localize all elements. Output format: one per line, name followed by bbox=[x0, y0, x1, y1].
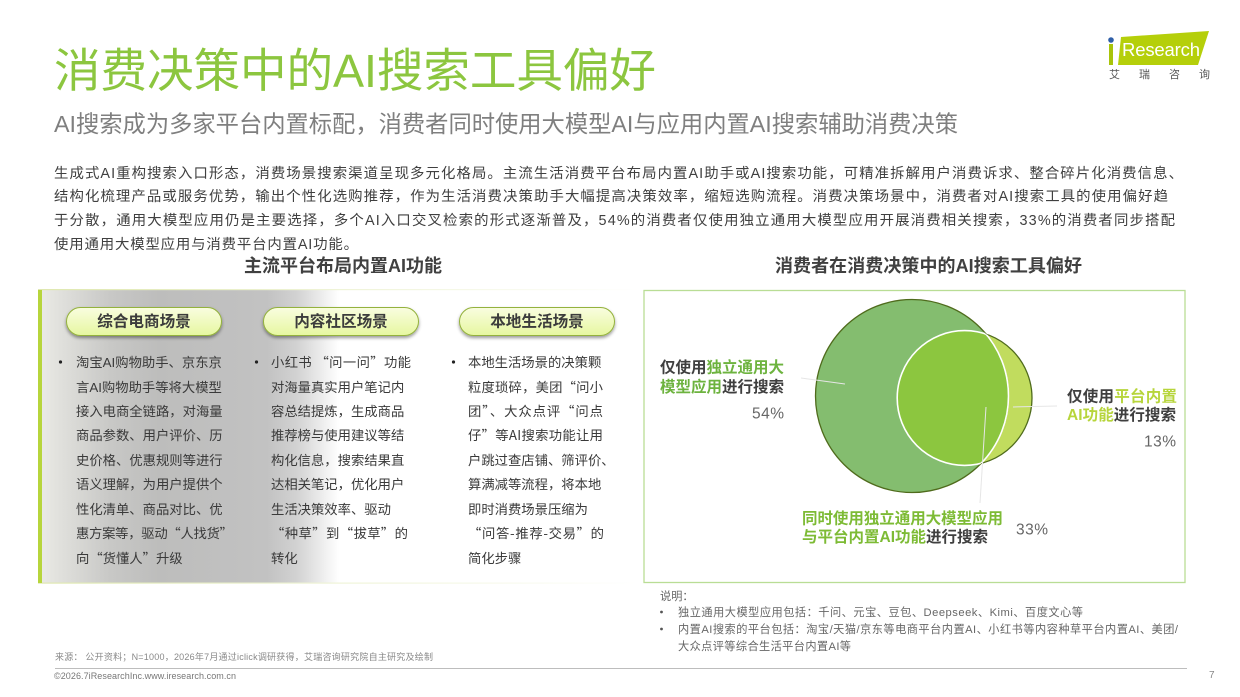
column: local life: 简化步骤 bbox=[468, 550, 521, 566]
column: local life: 算满减等流程，将本地 bbox=[468, 476, 601, 492]
label: both: 与平台内置AI功能进行搜索 bbox=[802, 527, 988, 546]
column: content community: “种草”到“拔草”的 bbox=[271, 523, 408, 542]
notes: 说明： bbox=[660, 589, 694, 603]
panel: platform scenarios bbox=[38, 289, 640, 584]
label: platform only bbox=[1067, 386, 1177, 450]
column: local life: 即时消费场景压缩为 bbox=[468, 502, 588, 517]
column: local life: 团”、大众点评“问点 bbox=[468, 401, 603, 420]
label: general models only: 仅使用独立通用大 bbox=[660, 358, 784, 376]
label: both: 33% bbox=[1016, 522, 1048, 538]
title: 消费决策中的AI搜索工具偏好 bbox=[54, 45, 656, 97]
column: e-commerce: 史价格、优惠规则等进行 bbox=[76, 452, 223, 468]
label: platform only: 13% bbox=[1144, 434, 1176, 450]
column: e-commerce: 商品参数、用户评价、历 bbox=[76, 427, 223, 443]
leader line: both bbox=[980, 407, 986, 503]
venn diagram bbox=[816, 300, 1032, 492]
column: local life: 粒度琐碎，美团“问小 bbox=[468, 377, 603, 396]
column: content community: 转化 bbox=[271, 551, 298, 566]
column: e-commerce: 性化清单、商品对比、优 bbox=[76, 502, 223, 517]
label: both: 同时使用独立通用大模型应用 bbox=[802, 508, 1003, 528]
heading: right panel: 消费者在消费决策中的AI搜索工具偏好 bbox=[775, 256, 1082, 276]
column: content community: 推荐榜与使用建议等结 bbox=[271, 427, 404, 443]
label: platform only: 仅使用平台内置 bbox=[1067, 386, 1177, 406]
column: e-commerce bbox=[59, 308, 233, 567]
column: e-commerce: 语义理解，为用户提供个 bbox=[76, 476, 223, 492]
intro text block: 生成式AI重构搜索入口形态，消费场景搜索渠道呈现多元化格局。主流生活消费平台布局内置AI助手或AI搜索功能，可精准拆解用户消费诉求、整合碎片化消费信息、 bbox=[54, 165, 1183, 182]
column: content community: 对海量真实用户笔记内 bbox=[271, 379, 404, 395]
column: content community: 生活决策效率、驱动 bbox=[271, 501, 391, 517]
column: local life: 仔”等AI搜索功能让用 bbox=[468, 425, 603, 444]
subtitle: AI搜索成为多家平台内置标配，消费者同时使用大模型AI与应用内置AI搜索辅助消费决策 bbox=[54, 111, 958, 137]
column: e-commerce: 综合电商场景 bbox=[97, 312, 191, 330]
notes: 内置AI搜索的平台包括：淘宝/天猫/京东等电商平台内置AI、小红书等内容种草平台内置AI、美团/ bbox=[678, 622, 1179, 636]
logo: iResearch bbox=[1108, 31, 1210, 81]
label: both bbox=[802, 508, 1048, 546]
intro text block: 于分散，通用大模型应用仍是主要选择，多个AI入口交叉检索的形式逐渐普及，54%的消费者仅使用独立通用大模型应用开展消费相关搜索，33%的消费者同步搭配 bbox=[54, 211, 1175, 229]
column: content community: 容总结提炼，生成商品 bbox=[271, 403, 404, 419]
column: e-commerce: 向“货懂人”升级 bbox=[76, 548, 183, 567]
logo: iResearch: Research bbox=[1122, 39, 1200, 60]
column: content community: 构化信息，搜索结果直 bbox=[271, 452, 404, 468]
notes bbox=[660, 589, 1179, 653]
column: local life bbox=[452, 308, 615, 566]
label: general models only: 54% bbox=[752, 406, 784, 422]
column: e-commerce: 惠方案等，驱动“人找货” bbox=[76, 523, 233, 542]
source: 来源： 公开资料；N=1000，2026年7月通过iclick调研获得，艾瑞咨询研究院自主研究及绘制 bbox=[55, 651, 433, 662]
notes: 大众点评等综合生活平台内置AI等 bbox=[678, 639, 851, 653]
intro text block bbox=[54, 165, 1183, 253]
logo: iResearch: 艾瑞咨询 bbox=[1109, 67, 1210, 81]
column: e-commerce: 言AI购物助手等将大模型 bbox=[76, 379, 222, 395]
column: local life: “问答-推荐-交易”的 bbox=[468, 523, 604, 542]
column: content community bbox=[255, 308, 418, 566]
column: e-commerce: 接入电商全链路，对海量 bbox=[76, 403, 223, 419]
copyright: ©2026.7iResearchInc.www.iresearch.com.cn bbox=[54, 671, 236, 681]
leader line: general models bbox=[801, 378, 845, 384]
heading: left panel: 主流平台布局内置AI功能 bbox=[244, 255, 442, 276]
column: content community: 内容社区场景 bbox=[294, 312, 388, 330]
intro text block: 结构化梳理产品或服务优势，输出个性化选购推荐，作为生活消费决策助手大幅提高决策效率，缩短选购流程。消费决策场景中，消费者对AI搜索工具的使用偏好趋 bbox=[54, 188, 1168, 205]
column: local life: 户跳过查店铺、筛评价、 bbox=[468, 452, 615, 468]
column: content community: 达相关笔记，优化用户 bbox=[271, 476, 404, 492]
label: general models only: 模型应用进行搜索 bbox=[660, 377, 784, 396]
panel: venn chart bbox=[644, 290, 1185, 582]
notes: 独立通用大模型应用包括：千问、元宝、豆包、Deepseek、Kimi、百度文心等 bbox=[678, 605, 1083, 619]
page number: 7 bbox=[1209, 670, 1215, 681]
column: content community: 小红书 “问一问”功能 bbox=[271, 352, 411, 371]
intro text block: 使用通用大模型应用与消费平台内置AI功能。 bbox=[54, 235, 358, 253]
leader line: platform bbox=[1013, 406, 1057, 407]
column: local life: 本地生活场景的决策颗 bbox=[468, 354, 601, 370]
label: general models only bbox=[660, 358, 784, 422]
label: platform only: AI功能进行搜索 bbox=[1067, 405, 1176, 424]
column: local life: 本地生活场景 bbox=[490, 312, 584, 330]
column: e-commerce: 淘宝AI购物助手、京东京 bbox=[76, 355, 222, 370]
